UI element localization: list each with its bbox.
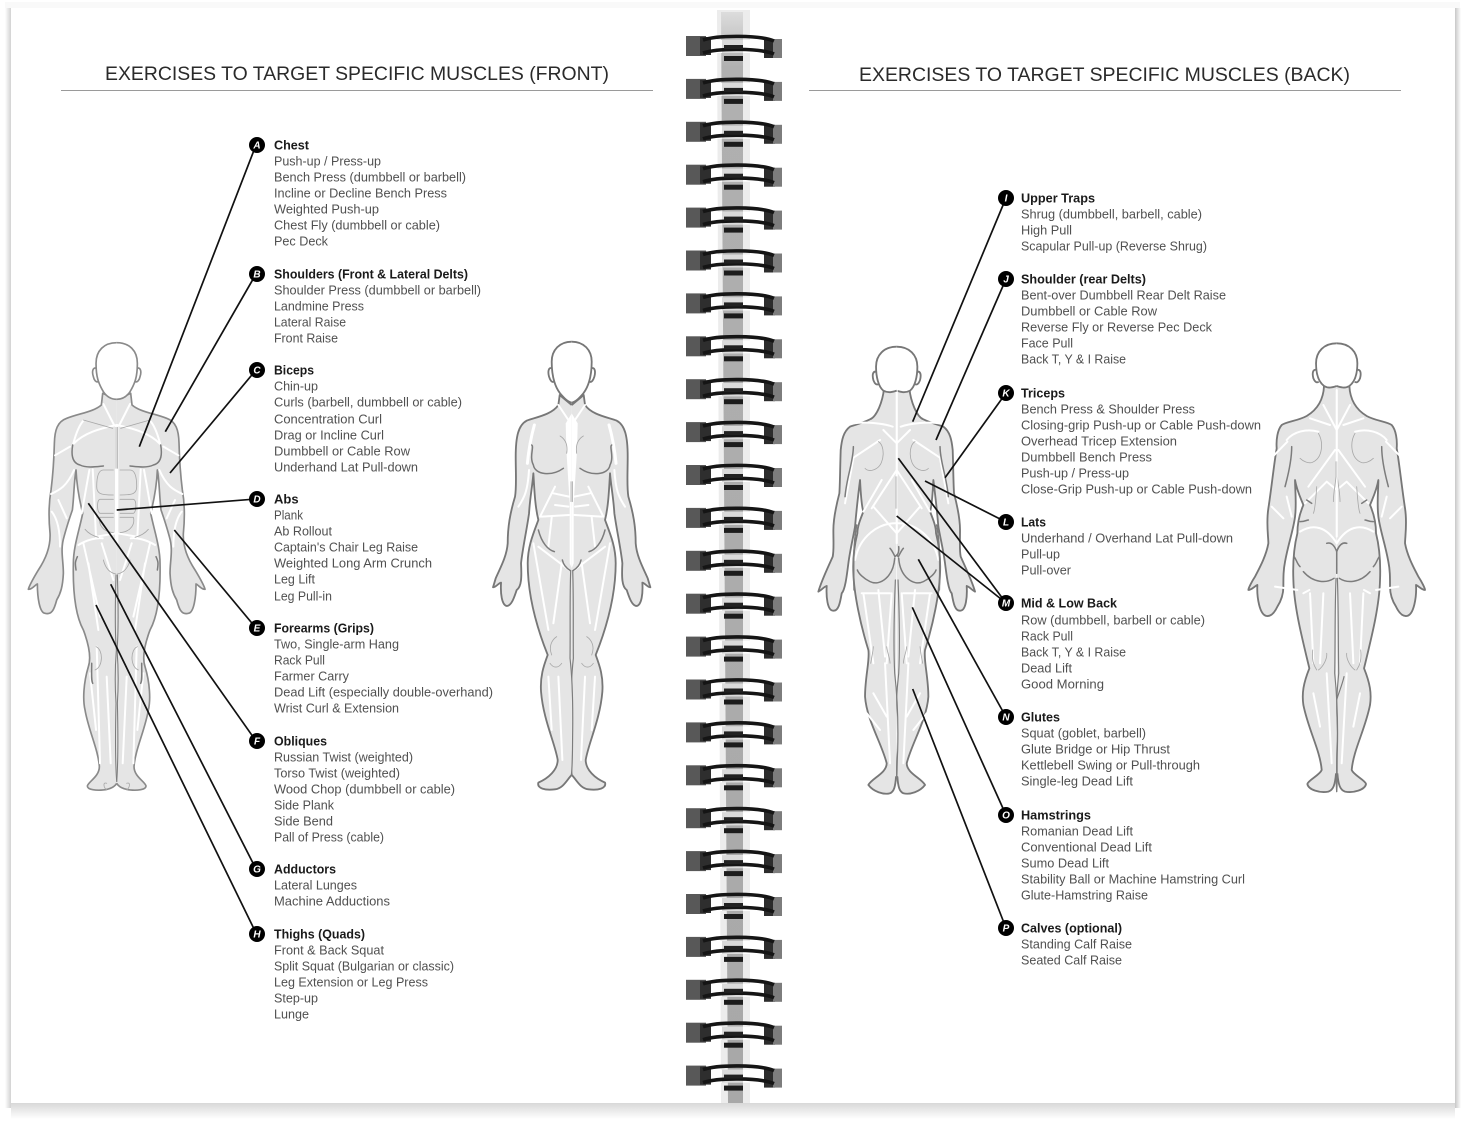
list: Upper Traps: Shrug (dumbbell, barbell, cable)	[1021, 206, 1202, 222]
list: Shoulder rear delts: J	[1003, 274, 1009, 286]
list: Biceps: Dumbbell or Cable Row	[274, 444, 411, 458]
list: Biceps: C	[253, 366, 261, 376]
list: Obliques: Russian Twist (weighted)	[274, 750, 413, 764]
list: Calves: P	[1003, 924, 1010, 934]
list: Chest: Chest Fly (dumbbell or cable)	[274, 218, 440, 232]
list: Abs: Leg Pull-in	[274, 588, 332, 604]
list: Mid and Low Back: M	[1002, 598, 1011, 610]
list: Lats	[998, 514, 1233, 578]
list: Abs: Ab Rollout	[274, 524, 332, 538]
list: Obliques: Side Bend	[274, 814, 333, 828]
list: Abs	[249, 491, 432, 604]
list: Biceps: Chin-up	[274, 378, 318, 394]
list: Hamstrings: Glute-Hamstring Raise	[1021, 888, 1148, 902]
list: Thighs: Split Squat (Bulgarian or classic)	[274, 958, 454, 974]
list: Upper Traps: I	[1005, 194, 1008, 204]
list: Triceps: K	[1002, 388, 1010, 400]
list: Thighs: Thighs (Quads)	[274, 926, 365, 942]
list: Shoulder rear delts: Shoulder (rear Delts)	[1021, 272, 1146, 286]
list: Obliques: Torso Twist (weighted)	[274, 766, 400, 780]
list: Shoulder rear delts: Reverse Fly or Reverse Pec Deck	[1021, 320, 1212, 334]
leader lines: front	[88, 145, 256, 933]
list: Thighs: H	[253, 930, 261, 940]
list: Shoulders: Front Raise	[274, 330, 338, 346]
list: Biceps	[249, 362, 462, 474]
list: Triceps: Bench Press & Shoulder Press	[1021, 402, 1195, 416]
title: back page: EXERCISES TO TARGET SPECIFIC MUSCLES (BACK)	[859, 64, 1350, 86]
list: Hamstrings: Sumo Dead Lift	[1021, 856, 1109, 870]
list: Shoulders: Shoulder Press (dumbbell or barbell)	[274, 282, 481, 298]
list: Biceps: Underhand Lat Pull-down	[274, 460, 418, 474]
list: Glutes: Single-leg Dead Lift	[1021, 774, 1133, 788]
list: Forearms: E	[254, 624, 261, 634]
list: Shoulder rear delts: Bent-over Dumbbell Rear Delt Raise	[1021, 288, 1226, 302]
list: Chest: Push-up / Press-up	[274, 154, 381, 168]
list: Hamstrings	[998, 807, 1245, 902]
list: Upper Traps	[998, 190, 1207, 254]
list: Calves: Calves (optional)	[1021, 920, 1122, 936]
list: Adductors: Adductors	[274, 862, 336, 876]
leader lines: back	[897, 198, 1006, 928]
list: Adductors: Lateral Lunges	[274, 878, 357, 892]
list: Chest	[249, 137, 466, 248]
list: Obliques: Obliques	[274, 734, 327, 748]
figure: male front	[28, 343, 205, 790]
list: Triceps	[998, 385, 1261, 496]
spiral binding spine	[686, 10, 782, 1103]
list: Forearms: Two, Single-arm Hang	[274, 636, 399, 652]
list: Hamstrings: O	[1002, 810, 1010, 822]
title: front page: EXERCISES TO TARGET SPECIFIC MUSCLES (FRONT)	[105, 63, 609, 85]
list: Abs: Leg Lift	[274, 572, 315, 586]
list: Mid and Low Back: Dead Lift	[1021, 660, 1072, 676]
list: Biceps: Concentration Curl	[274, 412, 382, 426]
list: Triceps: Close-Grip Push-up or Cable Push-down	[1021, 482, 1252, 496]
list: Adductors: G	[253, 864, 261, 876]
list: Triceps: Dumbbell Bench Press	[1021, 450, 1152, 464]
list: Triceps: Push-up / Press-up	[1021, 466, 1129, 480]
list: Glutes: Glutes	[1021, 710, 1060, 724]
list: Thighs: Step-up	[274, 990, 318, 1006]
list: Triceps: Overhead Tricep Extension	[1021, 434, 1177, 448]
list: Mid and Low Back: Row (dumbbell, barbell or cable)	[1021, 612, 1205, 628]
list: Triceps: Triceps	[1021, 386, 1065, 400]
list: Chest: Pec Deck	[274, 234, 328, 248]
list: Forearms: Farmer Carry	[274, 668, 349, 684]
list: Lats: Pull-over	[1021, 562, 1072, 578]
list: Shoulders: Lateral Raise	[274, 314, 346, 330]
list: Shoulders: Landmine Press	[274, 298, 364, 314]
list: Forearms: Forearms (Grips)	[274, 620, 374, 636]
list: Abs: Captain's Chair Leg Raise	[274, 540, 418, 554]
list: Calves	[998, 920, 1132, 968]
list: Hamstrings: Romanian Dead Lift	[1021, 824, 1133, 838]
list: Shoulders: B	[253, 270, 261, 280]
list: Lats: Underhand / Overhand Lat Pull-down	[1021, 530, 1233, 546]
list: Glutes	[998, 709, 1200, 788]
list: Mid and Low Back: Mid & Low Back	[1021, 596, 1118, 610]
list: Glutes: Kettlebell Swing or Pull-through	[1021, 758, 1200, 772]
list: Abs: Abs	[274, 492, 299, 506]
figure: female back	[818, 347, 975, 794]
list: Forearms: Wrist Curl & Extension	[274, 700, 399, 716]
list: Hamstrings: Stability Ball or Machine Hamstring Curl	[1021, 872, 1245, 886]
list: Thighs: Front & Back Squat	[274, 942, 384, 958]
list: Shoulder rear delts: Dumbbell or Cable Row	[1021, 304, 1158, 318]
list: Chest: Weighted Push-up	[274, 202, 379, 216]
list: Forearms	[249, 620, 493, 716]
figure: female front	[493, 342, 650, 790]
list: Lats: L	[1003, 518, 1009, 528]
list: Thighs	[249, 926, 454, 1022]
list: Biceps: Drag or Incline Curl	[274, 428, 384, 442]
list: Chest: Bench Press (dumbbell or barbell)	[274, 170, 466, 184]
list: Calves: Seated Calf Raise	[1021, 952, 1122, 968]
list: Mid and Low Back: Back T, Y & I Raise	[1021, 644, 1126, 660]
list: Mid and Low Back	[998, 595, 1205, 692]
list: Obliques	[249, 733, 455, 844]
list: Hamstrings: Hamstrings	[1021, 808, 1091, 822]
list: Glutes: Glute Bridge or Hip Thrust	[1021, 742, 1170, 756]
list: Obliques: F	[254, 736, 261, 748]
list: Upper Traps: Scapular Pull-up (Reverse Shrug)	[1021, 238, 1207, 254]
list: Lats: Lats	[1021, 514, 1046, 530]
list: Shoulder rear delts: Back T, Y & I Raise	[1021, 352, 1126, 366]
list: Abs: D	[253, 494, 261, 506]
list: Calves: Standing Calf Raise	[1021, 936, 1132, 952]
list: Glutes: Squat (goblet, barbell)	[1021, 726, 1146, 740]
list: Hamstrings: Conventional Dead Lift	[1021, 840, 1152, 854]
list: Triceps: Closing-grip Push-up or Cable Push-down	[1021, 418, 1261, 432]
list: Shoulder rear delts: Face Pull	[1021, 336, 1073, 350]
list: Biceps: Biceps	[274, 362, 314, 378]
list: Shoulders	[249, 266, 481, 346]
list: Obliques: Pall of Press (cable)	[274, 830, 384, 844]
list: Mid and Low Back: Rack Pull	[1021, 628, 1073, 644]
list: Upper Traps: High Pull	[1021, 222, 1072, 238]
list: Upper Traps: Upper Traps	[1021, 190, 1095, 206]
list: Adductors: Machine Adductions	[274, 894, 390, 908]
list: Lats: Pull-up	[1021, 546, 1060, 562]
list: Thighs: Lunge	[274, 1006, 309, 1022]
list: Glutes: N	[1002, 712, 1010, 724]
list: Abs: Plank	[274, 508, 303, 522]
list: Chest: Chest	[274, 138, 310, 152]
list: Obliques: Wood Chop (dumbbell or cable)	[274, 782, 455, 796]
list: Adductors	[249, 861, 390, 908]
list: Abs: Weighted Long Arm Crunch	[274, 556, 432, 570]
list: Obliques: Side Plank	[274, 798, 334, 812]
list: Shoulders: Shoulders (Front & Lateral Delts)	[274, 266, 468, 282]
list: Mid and Low Back: Good Morning	[1021, 676, 1104, 692]
figure: male back	[1248, 343, 1425, 792]
list: Thighs: Leg Extension or Leg Press	[274, 974, 428, 990]
list: Chest: A	[252, 140, 261, 152]
list: Forearms: Rack Pull	[274, 652, 325, 668]
list: Biceps: Curls (barbell, dumbbell or cable)	[274, 394, 462, 410]
list: Forearms: Dead Lift (especially double-overhand)	[274, 684, 493, 700]
list: Chest: Incline or Decline Bench Press	[274, 186, 447, 200]
list: Shoulder rear delts	[998, 271, 1226, 366]
